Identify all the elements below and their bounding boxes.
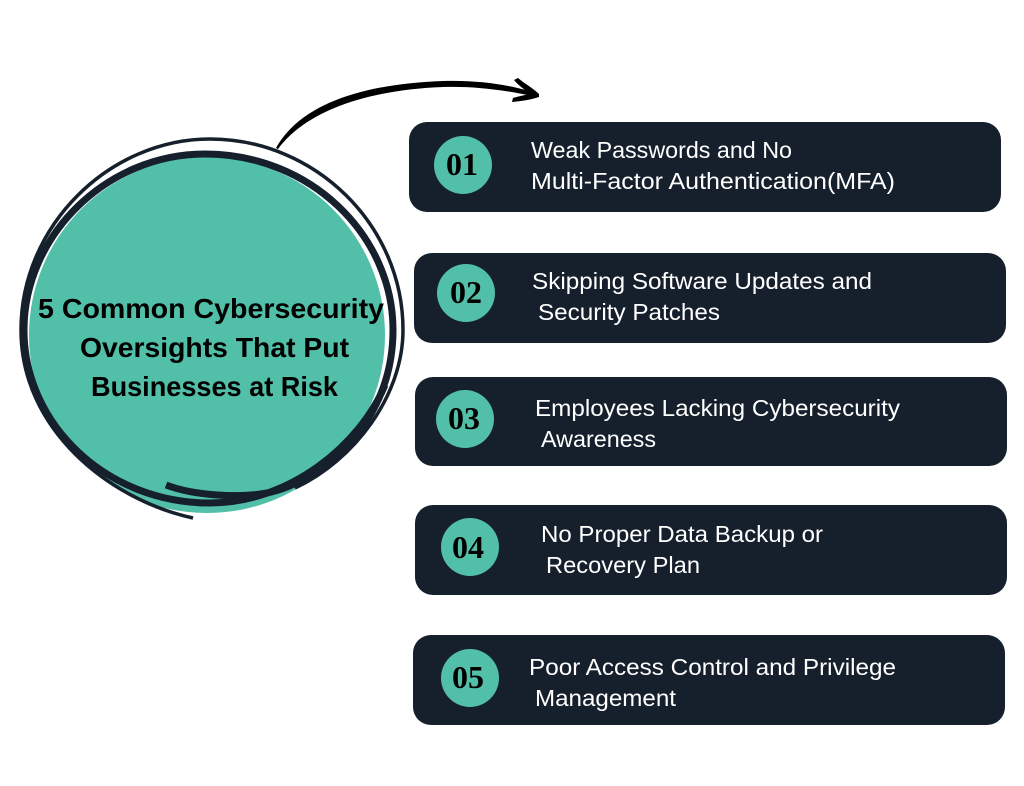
title: Oversights That Put bbox=[80, 332, 349, 363]
title: 5 Common Cybersecurity bbox=[38, 293, 384, 324]
number badge 01 bbox=[434, 136, 492, 194]
main circle with title bbox=[21, 139, 403, 518]
number badge 03: 03 bbox=[448, 400, 480, 436]
panel: item 01 bbox=[409, 122, 1001, 212]
arrow bbox=[276, 78, 539, 149]
panel: item 04 bbox=[415, 505, 1007, 595]
text 04 bbox=[541, 521, 823, 578]
number badge 05: 05 bbox=[452, 659, 484, 695]
text 03: Awareness bbox=[541, 426, 656, 452]
number badge 03 bbox=[436, 390, 494, 448]
number badge 04: 04 bbox=[452, 529, 484, 565]
panel: item 03 bbox=[415, 377, 1007, 466]
sketch ring outer bbox=[21, 139, 403, 518]
text 02: Security Patches bbox=[538, 299, 720, 325]
text 01 bbox=[531, 137, 895, 194]
text 04: No Proper Data Backup or bbox=[541, 521, 823, 547]
number badge 01: 01 bbox=[446, 146, 478, 182]
text 05: Poor Access Control and Privilege bbox=[529, 654, 896, 680]
text 04: Recovery Plan bbox=[546, 552, 700, 578]
title: Businesses at Risk bbox=[91, 371, 338, 402]
number badge 02 bbox=[437, 264, 495, 322]
text 01: Weak Passwords and No bbox=[531, 137, 792, 163]
text 03: Employees Lacking Cybersecurity bbox=[535, 395, 900, 421]
text 05: Management bbox=[535, 685, 676, 711]
number badge 04 bbox=[441, 518, 499, 576]
text 02 bbox=[532, 268, 872, 325]
teal circle bbox=[29, 157, 385, 513]
sketch ring inner bbox=[24, 154, 393, 503]
number badge 02: 02 bbox=[450, 274, 482, 310]
panel: item 02 bbox=[414, 253, 1006, 343]
text 03 bbox=[535, 395, 900, 452]
text 02: Skipping Software Updates and bbox=[532, 268, 872, 294]
text 01: Multi-Factor Authentication(MFA) bbox=[531, 168, 895, 194]
number badge 05 bbox=[441, 649, 499, 707]
panel: item 05 bbox=[413, 635, 1005, 725]
title bbox=[38, 293, 384, 402]
text 05 bbox=[529, 654, 896, 711]
